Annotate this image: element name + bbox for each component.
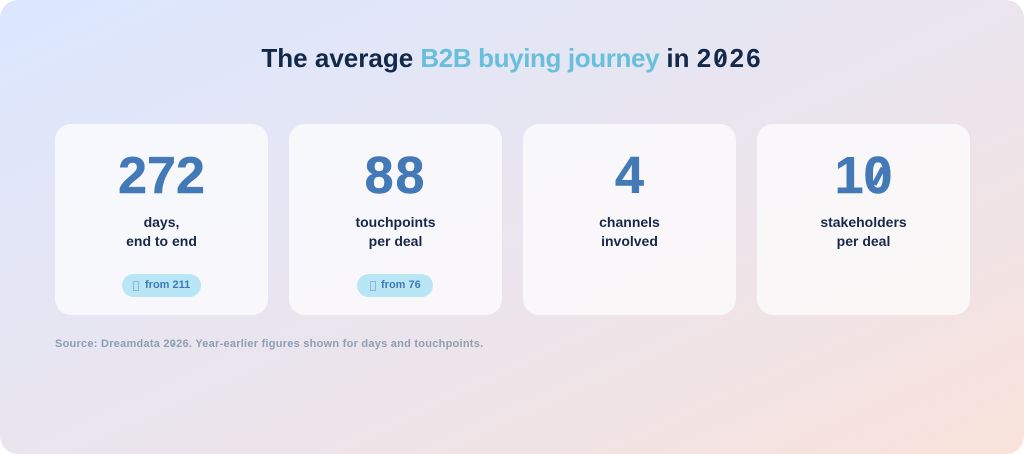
number: 10 stakeholders: 0 (864, 147, 892, 205)
pill: from 76: from 76 (381, 279, 421, 291)
pill: from 211: from 211 (145, 279, 190, 291)
panel: touchpoints card (289, 124, 502, 315)
source note: 0 (170, 338, 176, 350)
pill: from 76 (357, 274, 433, 297)
label: days (126, 214, 197, 249)
label: channels: involved (601, 233, 658, 249)
title: The average B2B buying journey in 2 26 (261, 43, 763, 73)
title: 0 (713, 43, 730, 73)
label: channels: channels (599, 214, 660, 230)
number: 10 stakeholders (835, 147, 892, 205)
source note: Source: Dreamdata 2 26. Year-earlier figures shown for days and touchpoints. (55, 338, 483, 350)
panel: stakeholders card (757, 124, 970, 315)
label: days: days, (144, 214, 179, 230)
panel: channels card (523, 124, 736, 315)
label: channels (599, 214, 660, 249)
pill: from 211 (122, 274, 201, 297)
label: touchpoints: per deal (369, 233, 422, 249)
label: stakeholders: stakeholders (820, 214, 907, 230)
label: touchpoints: touchpoints (355, 214, 436, 230)
label: stakeholders: per deal (837, 233, 890, 249)
label: touchpoints (355, 214, 436, 249)
label: days: end to end (126, 233, 197, 249)
number: 88 touchpoints: 88 (365, 147, 426, 205)
label: stakeholders (820, 214, 907, 249)
number: 272 days: 272 (118, 147, 205, 205)
number: 4 channels: 4 (615, 147, 644, 205)
number: 10 stakeholders: 1 (835, 147, 864, 205)
panel: days card (55, 124, 268, 315)
